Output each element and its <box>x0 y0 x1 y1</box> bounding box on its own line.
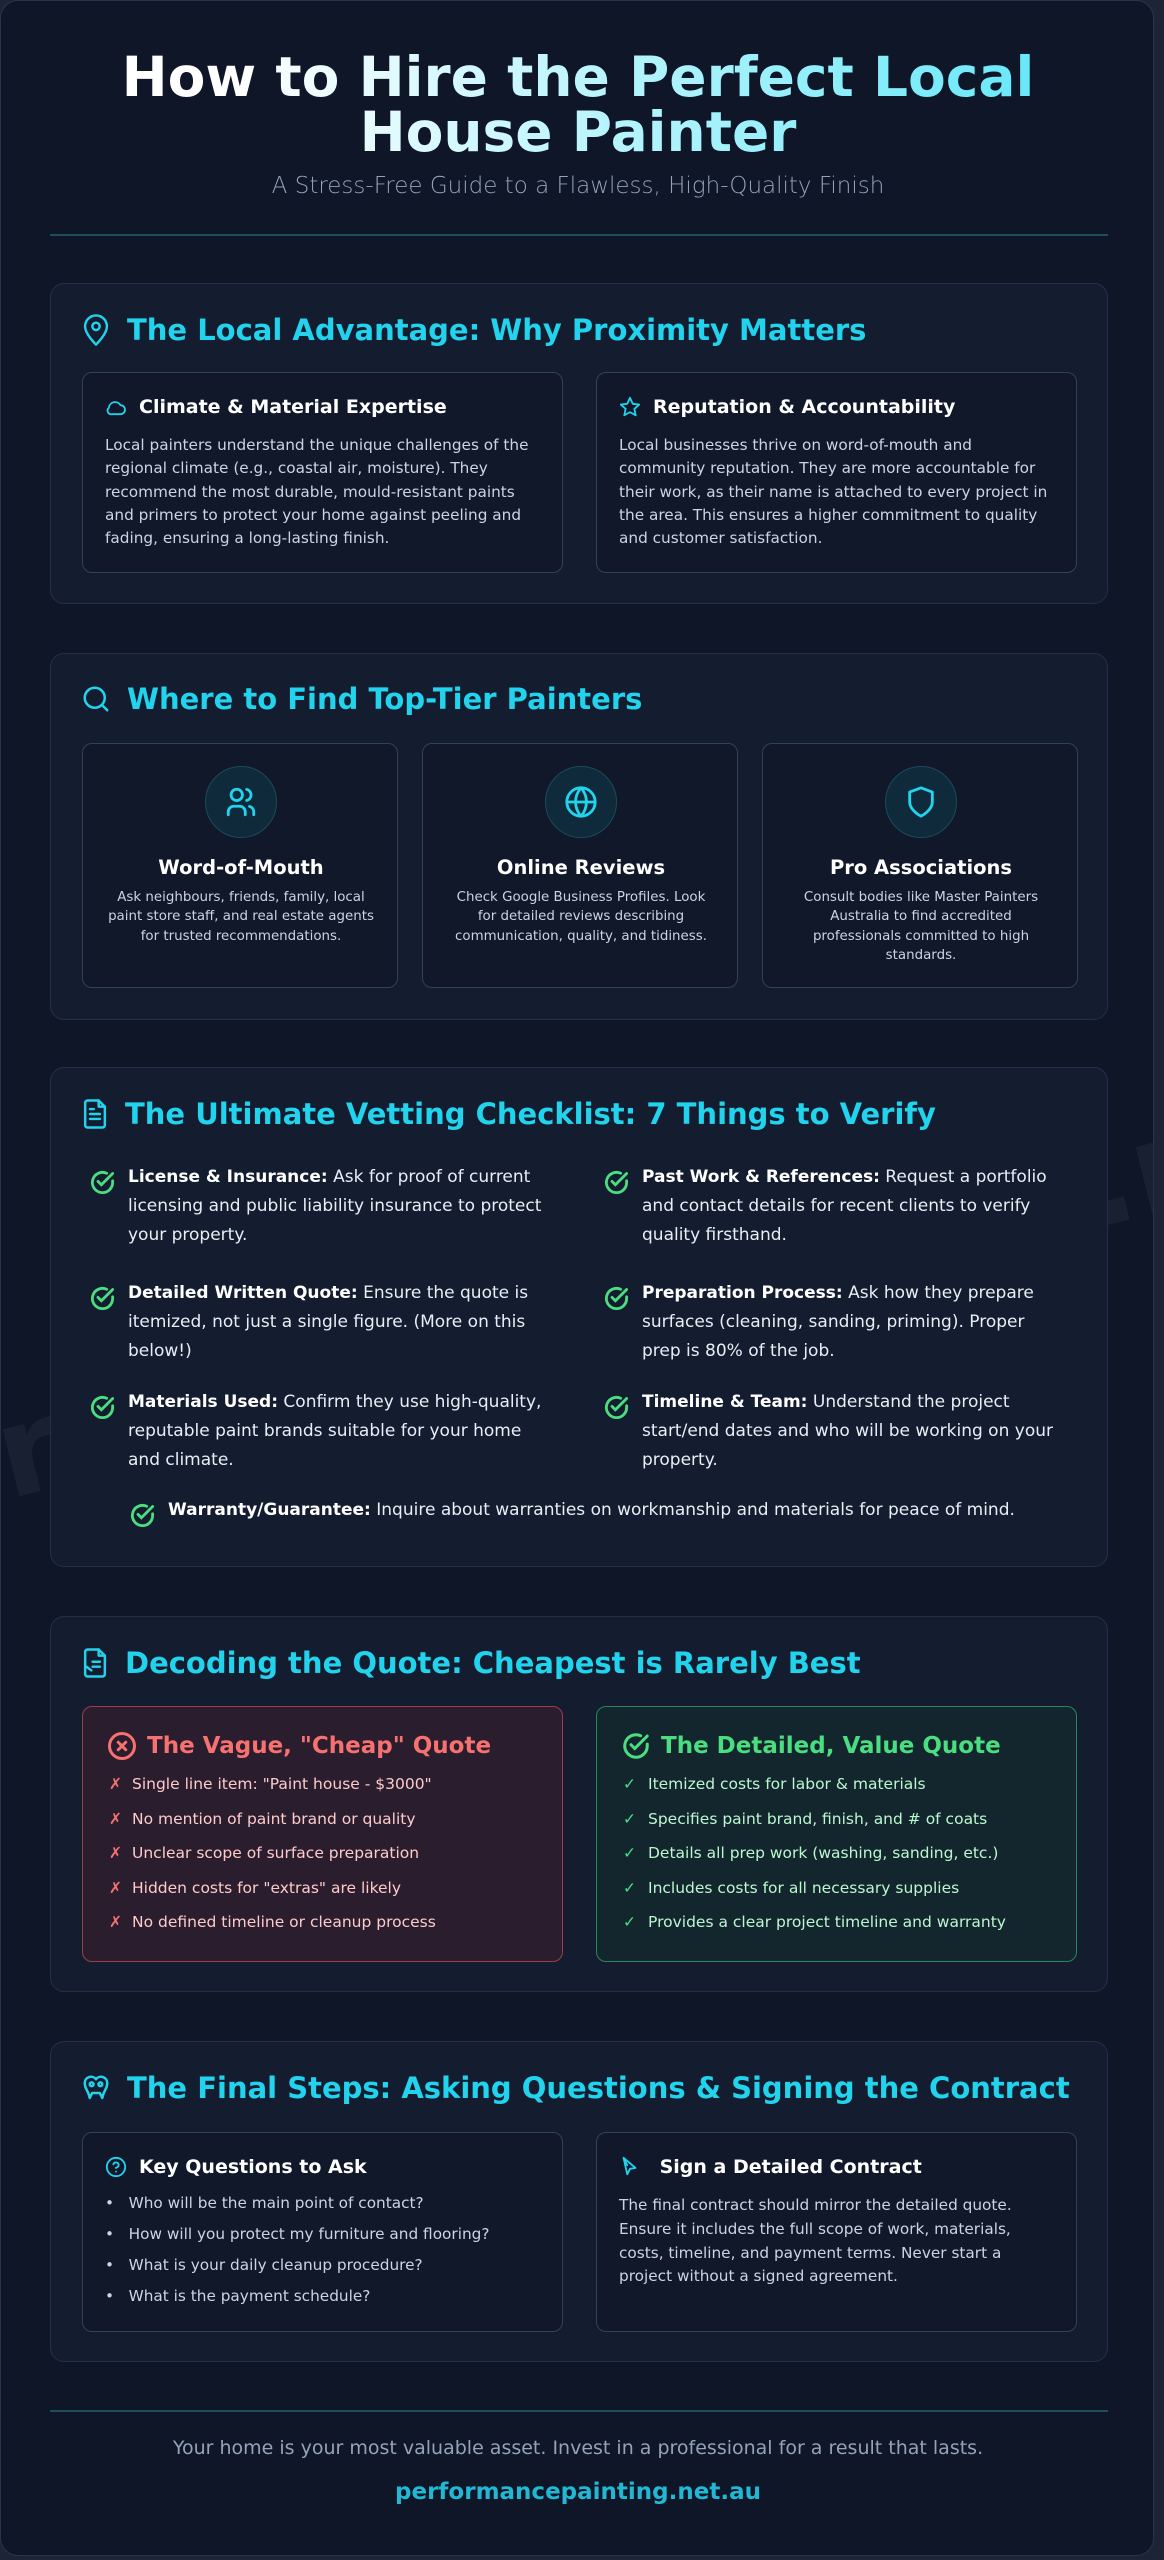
card: sign contract: The final contract should mirror the detailed quote. Ensure it includes the full scope of work, materials, costs, timeline, and payment terms. Never start a project without a signed agreement. <box>619 2196 1012 2285</box>
panel: decoding the quote <box>50 1616 1108 1992</box>
panel: final steps <box>50 2041 1108 2362</box>
icon: users <box>205 766 277 838</box>
card: detailed quote: The Detailed, Value Quote <box>661 1733 1001 1759</box>
checklist item: warranty: Warranty/Guarantee: Inquire about warranties on workmanship and materials for peace of mind. <box>168 1500 1015 1520</box>
icon: globe <box>545 766 617 838</box>
footer url: performancepainting.net.au <box>395 2479 761 2505</box>
card: key questions: • What is the payment schedule? <box>105 2287 370 2305</box>
panel: where to find <box>50 653 1108 1020</box>
card: sign contract: Sign a Detailed Contract <box>660 2156 922 2178</box>
panel: vetting checklist <box>50 1067 1108 1567</box>
card: climate: Local painters understand the unique challenges of the regional climate (e.g., coastal air, moisture). They recommend the most durable, mould-resistant paints and primers to protect your home against peeling and fading, ensuring a long-lasting finish. <box>105 436 529 547</box>
heading: local advantage: The Local Advantage: Why Proximity Matters <box>127 313 866 347</box>
card: word of mouth: Word-of-Mouth <box>158 856 324 879</box>
card: detailed quote: ✓ Specifies paint brand, finish, and # of coats <box>623 1810 987 1828</box>
card: online reviews <box>422 743 738 988</box>
card: detailed quote <box>596 1706 1077 1962</box>
checklist item: quote: Detailed Written Quote: Ensure the quote is itemized, not just a single figure. (More on this below!) <box>128 1283 528 1361</box>
checklist item: license: License & Insurance: Ask for proof of current licensing and public liability insurance to protect your property. <box>128 1167 541 1245</box>
card: vague quote: The Vague, "Cheap" Quote <box>147 1733 491 1759</box>
footer text: Your home is your most valuable asset. Invest in a professional for a result that lasts. <box>173 2437 983 2459</box>
card: word of mouth: Ask neighbours, friends, family, local paint store staff, and real estate agents for trusted recommendations. <box>108 890 374 944</box>
card: climate <box>82 372 563 573</box>
card: reputation: Reputation & Accountability <box>653 396 955 418</box>
card: vague quote: ✗ No mention of paint brand or quality <box>109 1810 416 1828</box>
card: sign contract <box>596 2132 1077 2332</box>
card: key questions: Key Questions to Ask <box>139 2156 367 2178</box>
icon: shield <box>885 766 957 838</box>
title: House Painter <box>360 100 796 164</box>
heading: final steps: The Final Steps: Asking Questions & Signing the Contract <box>127 2071 1070 2105</box>
card: detailed quote: ✓ Itemized costs for labor & materials <box>623 1775 926 1793</box>
card: key questions: • How will you protect my furniture and flooring? <box>105 2225 489 2243</box>
card: key questions <box>82 2132 563 2332</box>
card: key questions: • Who will be the main point of contact? <box>105 2194 424 2212</box>
checklist item: preparation: Preparation Process: Ask how they prepare surfaces (cleaning, sanding, priming). Proper prep is 80% of the job. <box>642 1283 1034 1361</box>
card: word of mouth <box>82 743 398 988</box>
card: reputation <box>596 372 1077 573</box>
card: vague quote <box>82 1706 563 1962</box>
card: reputation: Local businesses thrive on word-of-mouth and community reputation. They are more accountable for their work, as their name is attached to every project in the area. This ensures a higher commitment to quality and customer satisfaction. <box>619 436 1047 547</box>
title <box>1 50 1155 160</box>
card: pro associations: Pro Associations <box>830 856 1012 879</box>
title: How to Hire the Perfect Local <box>122 45 1034 109</box>
card: online reviews: Check Google Business Profiles. Look for detailed reviews describing communication, quality, and tidiness. <box>455 890 707 944</box>
checklist item: materials: Materials Used: Confirm they use high-quality, reputable paint brands suitable for your home and climate. <box>128 1392 541 1470</box>
checklist item: past work: Past Work & References: Request a portfolio and contact details for recent clients to verify quality firsthand. <box>642 1167 1047 1245</box>
heading: where to find: Where to Find Top-Tier Painters <box>127 682 642 716</box>
card: vague quote: ✗ Unclear scope of surface preparation <box>109 1844 419 1862</box>
card: key questions: • What is your daily cleanup procedure? <box>105 2256 423 2274</box>
card: climate: Climate & Material Expertise <box>139 396 447 418</box>
card: detailed quote: ✓ Provides a clear project timeline and warranty <box>623 1913 1006 1931</box>
card: online reviews: Online Reviews <box>497 856 665 879</box>
card: vague quote: ✗ Single line item: "Paint house - $3000" <box>109 1775 432 1793</box>
card: vague quote: ✗ No defined timeline or cleanup process <box>109 1913 436 1931</box>
heading: quote: Decoding the Quote: Cheapest is Rarely Best <box>125 1646 861 1680</box>
subtitle: A Stress-Free Guide to a Flawless, High-Quality Finish <box>272 173 884 199</box>
card: pro associations <box>762 743 1078 988</box>
panel: local advantage <box>50 283 1108 604</box>
card: detailed quote: ✓ Includes costs for all necessary supplies <box>623 1879 959 1897</box>
heading: checklist: The Ultimate Vetting Checklist: 7 Things to Verify <box>125 1097 936 1131</box>
card: detailed quote: ✓ Details all prep work (washing, sanding, etc.) <box>623 1844 998 1862</box>
checklist item: timeline: Timeline & Team: Understand the project start/end dates and who will be working on your property. <box>642 1392 1053 1470</box>
card: pro associations: Consult bodies like Master Painters Australia to find accredited professionals committed to high standards. <box>804 890 1038 963</box>
card: vague quote: ✗ Hidden costs for "extras" are likely <box>109 1879 401 1897</box>
